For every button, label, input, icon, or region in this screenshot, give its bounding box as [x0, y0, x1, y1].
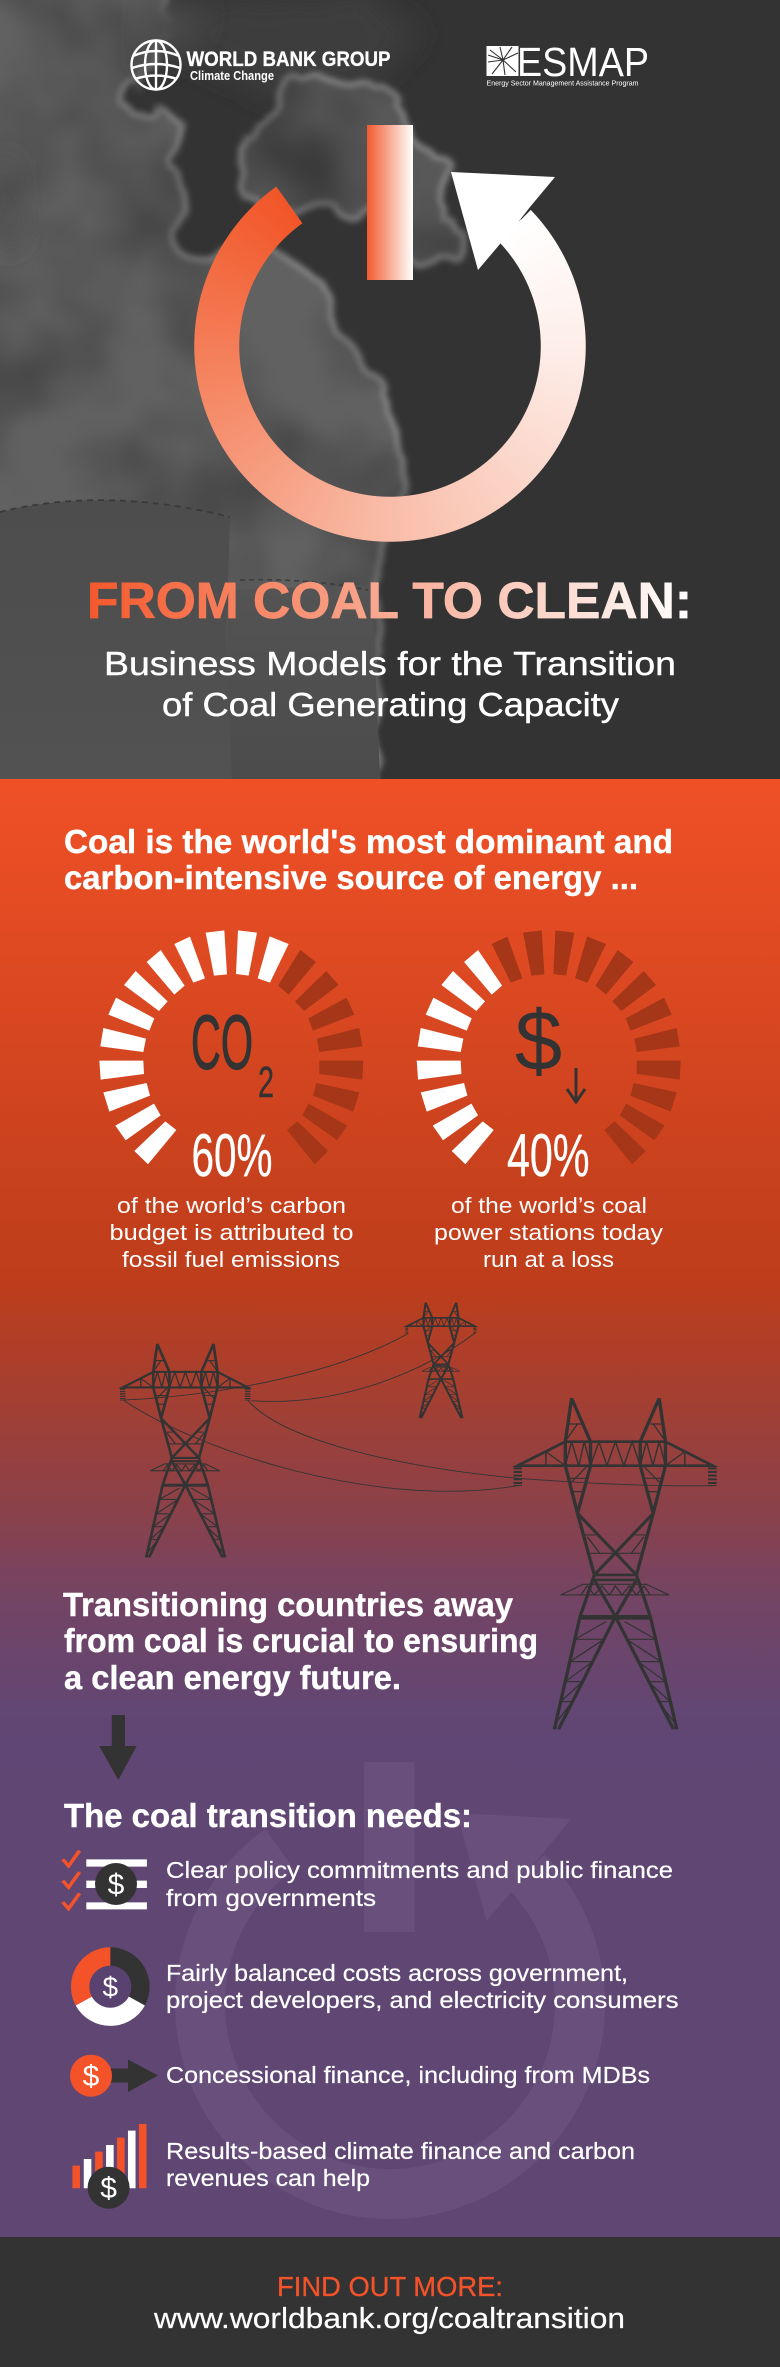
icon: dollar with down arrow — [515, 994, 585, 1102]
icon: dollar with arrow: $ — [83, 2060, 100, 2093]
icon: power ring — [194, 150, 586, 542]
text: results-based finance: revenues can help — [166, 2165, 370, 2191]
icon: starburst box — [486, 46, 518, 76]
caption: carbon budget: fossil fuel emissions — [122, 1247, 340, 1272]
text: results-based finance: Results-based climate finance and carbon — [166, 2138, 635, 2164]
heading: transitioning countries — [63, 1586, 538, 1696]
text: policy commitments — [166, 1857, 673, 1911]
logo wordmark: ESMAP — [517, 39, 649, 85]
icon: CO2 — [191, 1000, 274, 1107]
heading: transitioning countries: Transitioning countries away — [63, 1586, 514, 1623]
caption: power stations: of the world’s coal — [451, 1193, 647, 1218]
subtitle — [104, 645, 676, 723]
title: FROM COAL TO CLEAN: — [87, 572, 692, 629]
icon: tower middle — [405, 1303, 476, 1418]
arrow: down — [99, 1715, 137, 1780]
panel: header with smoke photo — [0, 0, 470, 779]
icon: tower right — [514, 1398, 717, 1729]
heading: transitioning countries: a clean energy future. — [64, 1659, 401, 1696]
icon: donut with dollar — [80, 1956, 140, 2017]
text: balanced costs: Fairly balanced costs across government, — [166, 1960, 628, 1986]
icon: CO2: 2 — [258, 1058, 274, 1107]
panel: footer — [0, 2237, 780, 2367]
footer url: www.worldbank.org/coaltransition — [153, 2303, 625, 2335]
gauge: 40 percent — [417, 930, 681, 1164]
icon: power arrow head — [451, 172, 555, 270]
caption: carbon budget — [110, 1193, 354, 1272]
heading: coal is dominant — [64, 823, 673, 896]
heading: the coal transition needs: The coal transition needs: — [64, 1797, 472, 1834]
subtitle: of Coal Generating Capacity — [162, 686, 620, 723]
icon: globe — [132, 40, 180, 90]
text: concessional finance: Concessional finance, including from MDBs — [166, 2062, 650, 2088]
logo: ESMAP — [486, 39, 649, 88]
icon: checklist with dollar: $ — [108, 1868, 125, 1902]
text: policy commitments: from governments — [166, 1885, 376, 1911]
caption: carbon budget: of the world’s carbon — [117, 1193, 346, 1218]
stat: 60%: 60% — [192, 1122, 272, 1189]
caption: power stations: run at a loss — [483, 1247, 614, 1272]
heading: coal is dominant: Coal is the world's most dominant and — [64, 823, 673, 860]
caption: carbon budget: budget is attributed to — [110, 1220, 354, 1245]
power lines — [124, 1333, 711, 1491]
text: policy commitments: Clear policy commitments and public finance — [166, 1857, 673, 1883]
watermark power icon — [200, 1762, 580, 2194]
text: results-based finance — [166, 2138, 635, 2191]
icon: dollar with down arrow: $ — [515, 994, 562, 1089]
stat: 40%: 40% — [507, 1122, 590, 1189]
caption: power stations — [434, 1193, 663, 1272]
icon: donut with dollar: $ — [103, 1972, 119, 2003]
text: balanced costs: project developers, and electricity consumers — [166, 1987, 678, 2013]
logo subtext: Energy Sector Management Assistance Program — [486, 78, 638, 88]
icon: CO2: CO — [191, 1000, 253, 1086]
logo subtext: Climate Change — [190, 69, 274, 83]
logo: World Bank Group — [132, 40, 390, 90]
subtitle: Business Models for the Transition — [104, 645, 676, 682]
gauge: 60 percent — [99, 930, 363, 1164]
icon: bar chart with dollar: $ — [100, 2172, 117, 2205]
icon: power bar — [367, 125, 413, 280]
logo text: WORLD BANK GROUP — [186, 48, 390, 71]
panel: gradient middle section — [0, 779, 780, 2237]
footer heading: FIND OUT MORE: — [277, 2271, 503, 2302]
icon: tower left — [120, 1344, 251, 1557]
text: balanced costs — [166, 1960, 678, 2013]
icon: dollar with arrow — [70, 2055, 158, 2097]
heading: transitioning countries: from coal is crucial to ensuring — [64, 1622, 538, 1659]
icon: bar chart with dollar — [72, 2124, 146, 2209]
heading: coal is dominant: carbon-intensive source of energy ... — [64, 859, 638, 896]
caption: power stations: power stations today — [434, 1220, 663, 1245]
icon: checklist with dollar — [63, 1851, 147, 1909]
